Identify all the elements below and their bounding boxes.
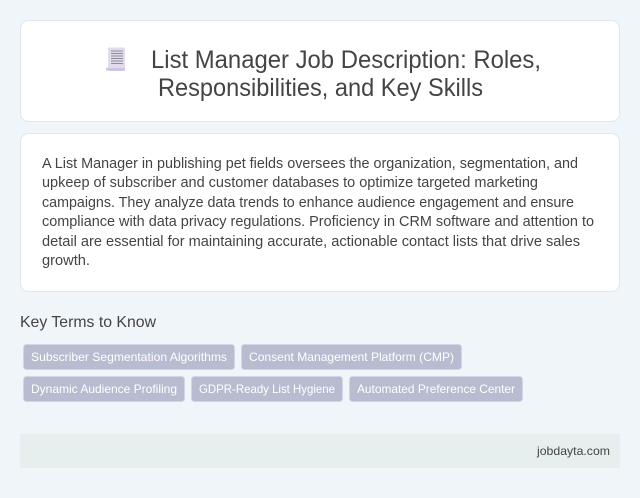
footer bar: jobdayta.com	[536, 444, 610, 458]
heading: title: Responsibilities, and Key Skills	[158, 74, 483, 102]
heading: key terms: Key Terms to Know	[20, 314, 156, 331]
tag: dynamic audience profiling: Dynamic Audience Profiling	[31, 382, 177, 396]
tag: gdpr-ready list hygiene	[192, 376, 342, 402]
heading: title: List Manager Job Description: Roles,	[151, 46, 541, 74]
text block: description: campaigns. They analyze data trends to enhance audience engagement and ensure	[42, 195, 574, 211]
heading: title	[151, 46, 541, 102]
tag: dynamic audience profiling	[24, 376, 184, 402]
text block: description: detail are essential for maintaining accurate, actionable contact lists that drive sales	[42, 234, 580, 250]
text block: description: upkeep of subscriber and customer databases to optimize targeted marketing	[42, 175, 538, 191]
panel: title card	[20, 20, 620, 122]
tag: automated preference center	[350, 376, 522, 402]
panel: description card	[20, 134, 620, 292]
tag: automated preference center: Automated Preference Center	[357, 382, 515, 396]
text block: description	[42, 156, 594, 269]
tag: consent management platform: Consent Management Platform (CMP)	[249, 350, 454, 364]
icon: scroll document	[106, 47, 125, 71]
text block: description: A List Manager in publishing pet fields oversees the organization, segmentation, and	[42, 156, 578, 172]
tag: subscriber segmentation algorithms	[24, 344, 234, 370]
footer bar	[20, 434, 620, 468]
text block: description: growth.	[42, 253, 90, 269]
text block: description: compliance with data privacy regulations. Proficiency in CRM software and attention to	[42, 214, 594, 230]
tag: subscriber segmentation algorithms: Subscriber Segmentation Algorithms	[31, 350, 227, 364]
tag: consent management platform	[242, 344, 462, 370]
tag: gdpr-ready list hygiene: GDPR-Ready List Hygiene	[199, 382, 335, 396]
